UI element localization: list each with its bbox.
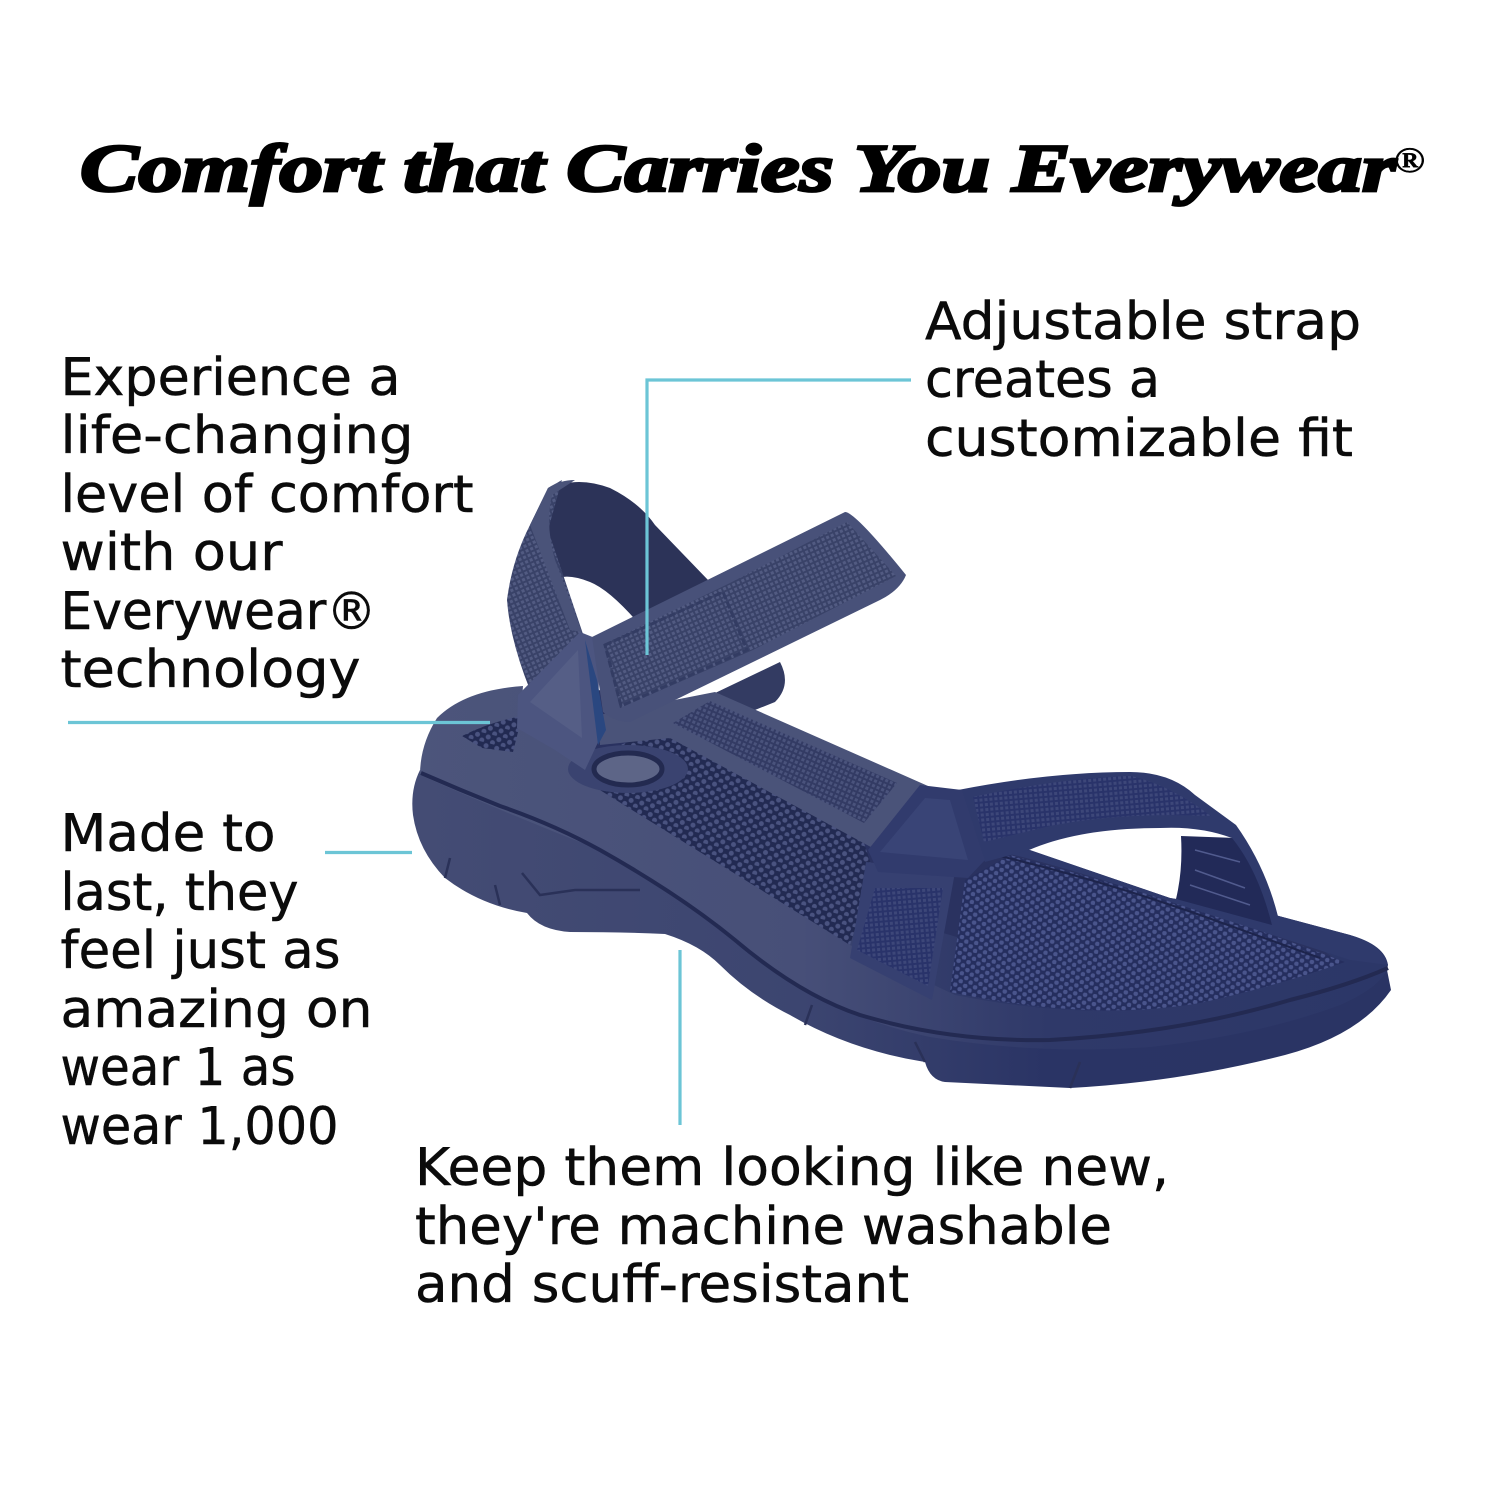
toe strap <box>958 772 1280 925</box>
buckle triangle <box>517 632 600 770</box>
medallion <box>568 745 688 793</box>
connector line: comfort <box>68 721 490 724</box>
toe strap lining <box>1176 836 1272 925</box>
text: made to last: amazing on <box>60 980 372 1040</box>
text: adjustable strap: customizable fit <box>925 409 1353 469</box>
text: comfort technology: Experience a <box>60 348 400 408</box>
text: made to last <box>60 804 372 1157</box>
text: comfort technology: life-changing <box>60 406 414 466</box>
sole groove line <box>421 773 1388 1040</box>
text: comfort technology: technology <box>60 640 360 700</box>
title: ® <box>1394 140 1425 180</box>
sandal outsole <box>412 770 1391 1088</box>
strap texture <box>604 522 896 708</box>
text: comfort technology: Everywear® <box>60 582 376 642</box>
illustration: navy sandal <box>412 480 1391 1088</box>
text: comfort technology: level of comfort <box>60 465 474 525</box>
connector line: washable <box>678 950 682 1125</box>
title: Comfort that Carries You Everywear <box>80 130 1397 206</box>
text: machine washable: Keep them looking like new, <box>415 1138 1169 1198</box>
strap connector <box>868 785 985 878</box>
footbed rear <box>600 727 873 945</box>
far rim of footbed <box>1000 850 1388 965</box>
text: made to last: wear 1 as <box>60 1038 296 1098</box>
text: adjustable strap: creates a <box>925 350 1160 410</box>
velcro patch <box>605 592 747 706</box>
text: made to last: last, they <box>60 863 298 923</box>
footbed front <box>950 855 1345 1010</box>
text: machine washable <box>415 1138 1169 1315</box>
heel strap front <box>507 480 585 690</box>
text: comfort technology <box>60 348 474 700</box>
far-side strap stub <box>690 662 785 712</box>
mid strap <box>598 692 928 852</box>
connector line: adjustable strap <box>647 380 911 655</box>
lower strap <box>850 862 955 1000</box>
text: made to last: Made to <box>60 804 276 864</box>
heel footbed <box>462 716 522 752</box>
text: made to last: wear 1,000 <box>60 1097 338 1157</box>
text: comfort technology: with our <box>60 523 283 583</box>
connector line: durability <box>325 851 412 854</box>
text: adjustable strap: Adjustable strap <box>925 292 1361 352</box>
text: machine washable: and scuff-resistant <box>415 1255 909 1315</box>
outsole tread marks <box>445 858 1080 1088</box>
footbed underlay <box>470 690 1350 1010</box>
midsole band <box>420 686 1388 1049</box>
adjustable strap <box>592 512 906 722</box>
text: made to last: feel just as <box>60 921 340 981</box>
heel strap inner lining <box>540 482 708 625</box>
text: machine washable: they're machine washable <box>415 1197 1112 1257</box>
text: adjustable strap <box>925 292 1361 469</box>
